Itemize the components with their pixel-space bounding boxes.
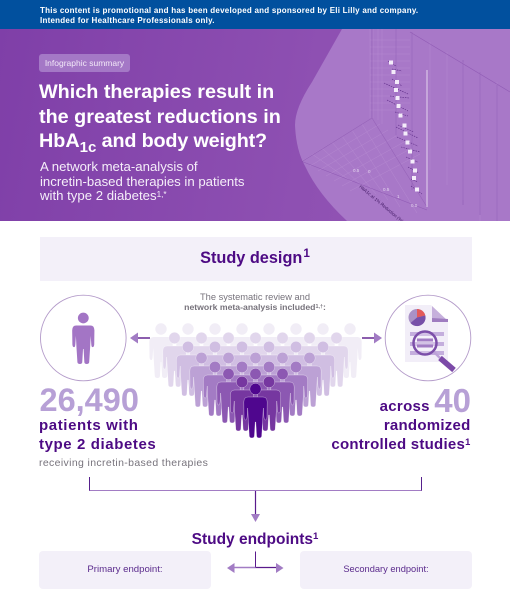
patients note: receiving incretin-based therapies [39, 457, 208, 469]
patients label: patients with [39, 417, 138, 434]
hero 3D forest plot graphic: 1 [397, 194, 400, 199]
subtitle: incretin-based therapies in patients [40, 174, 245, 189]
icon: patient in circle [41, 295, 126, 381]
secondary endpoint card: Secondary endpoint: [343, 564, 429, 574]
hero 3D forest plot graphic: 0.5 [353, 168, 360, 173]
subtitle: A network meta-analysis of [40, 159, 198, 174]
title: Which therapies result in [39, 81, 274, 103]
promotional banner: This content is promotional and has been developed and sponsored by Eli Lilly and company. [40, 6, 418, 14]
promotional banner: Intended for Healthcare Professionals only. [40, 16, 215, 24]
subtitle: with type 2 diabetes1,* [40, 188, 167, 203]
left arrow [130, 332, 150, 344]
bracket connector [90, 477, 422, 522]
badge: infographic summary: Infographic summary [45, 58, 124, 68]
hero panel [0, 29, 510, 221]
hero 3D forest plot graphic: 0.5 [383, 187, 390, 192]
icon: document and magnifier in circle [385, 295, 471, 381]
study endpoints heading: Study endpoints1 [192, 530, 318, 548]
patients label [39, 417, 156, 453]
title [39, 81, 281, 156]
hero 3D forest plot graphic: HbA1c at 1% Reduction (%) [358, 184, 405, 224]
patients label: type 2 diabetes [39, 436, 156, 453]
crowd of patients [149, 323, 362, 438]
intro text: The systematic review and [200, 292, 310, 302]
intro text [184, 292, 326, 312]
primary endpoint card [39, 551, 211, 589]
hero 3D forest plot graphic: 0.0 [411, 203, 418, 208]
intro text: network meta-analysis included1,†: [184, 302, 326, 312]
right arrow [362, 332, 382, 344]
hero 3D forest plot graphic [295, 29, 510, 221]
hero 3D forest plot graphic: 0 [368, 169, 371, 174]
study design banner: Study design1 [200, 247, 310, 267]
subtitle [40, 159, 245, 203]
secondary endpoint card [300, 551, 472, 589]
promotional banner [0, 0, 510, 29]
title: HbA1c and body weight? [39, 130, 267, 156]
study design banner [40, 237, 472, 281]
badge: infographic summary [39, 54, 130, 72]
studies label: randomized [384, 417, 470, 434]
primary endpoint card: Primary endpoint: [87, 564, 163, 575]
studies count: across 40 [380, 382, 471, 419]
title: the greatest reductions in [39, 106, 281, 128]
endpoint arrows [227, 552, 284, 573]
patient count: 26,490 [40, 382, 139, 418]
studies label [331, 417, 470, 453]
studies label: controlled studies1 [331, 436, 470, 453]
